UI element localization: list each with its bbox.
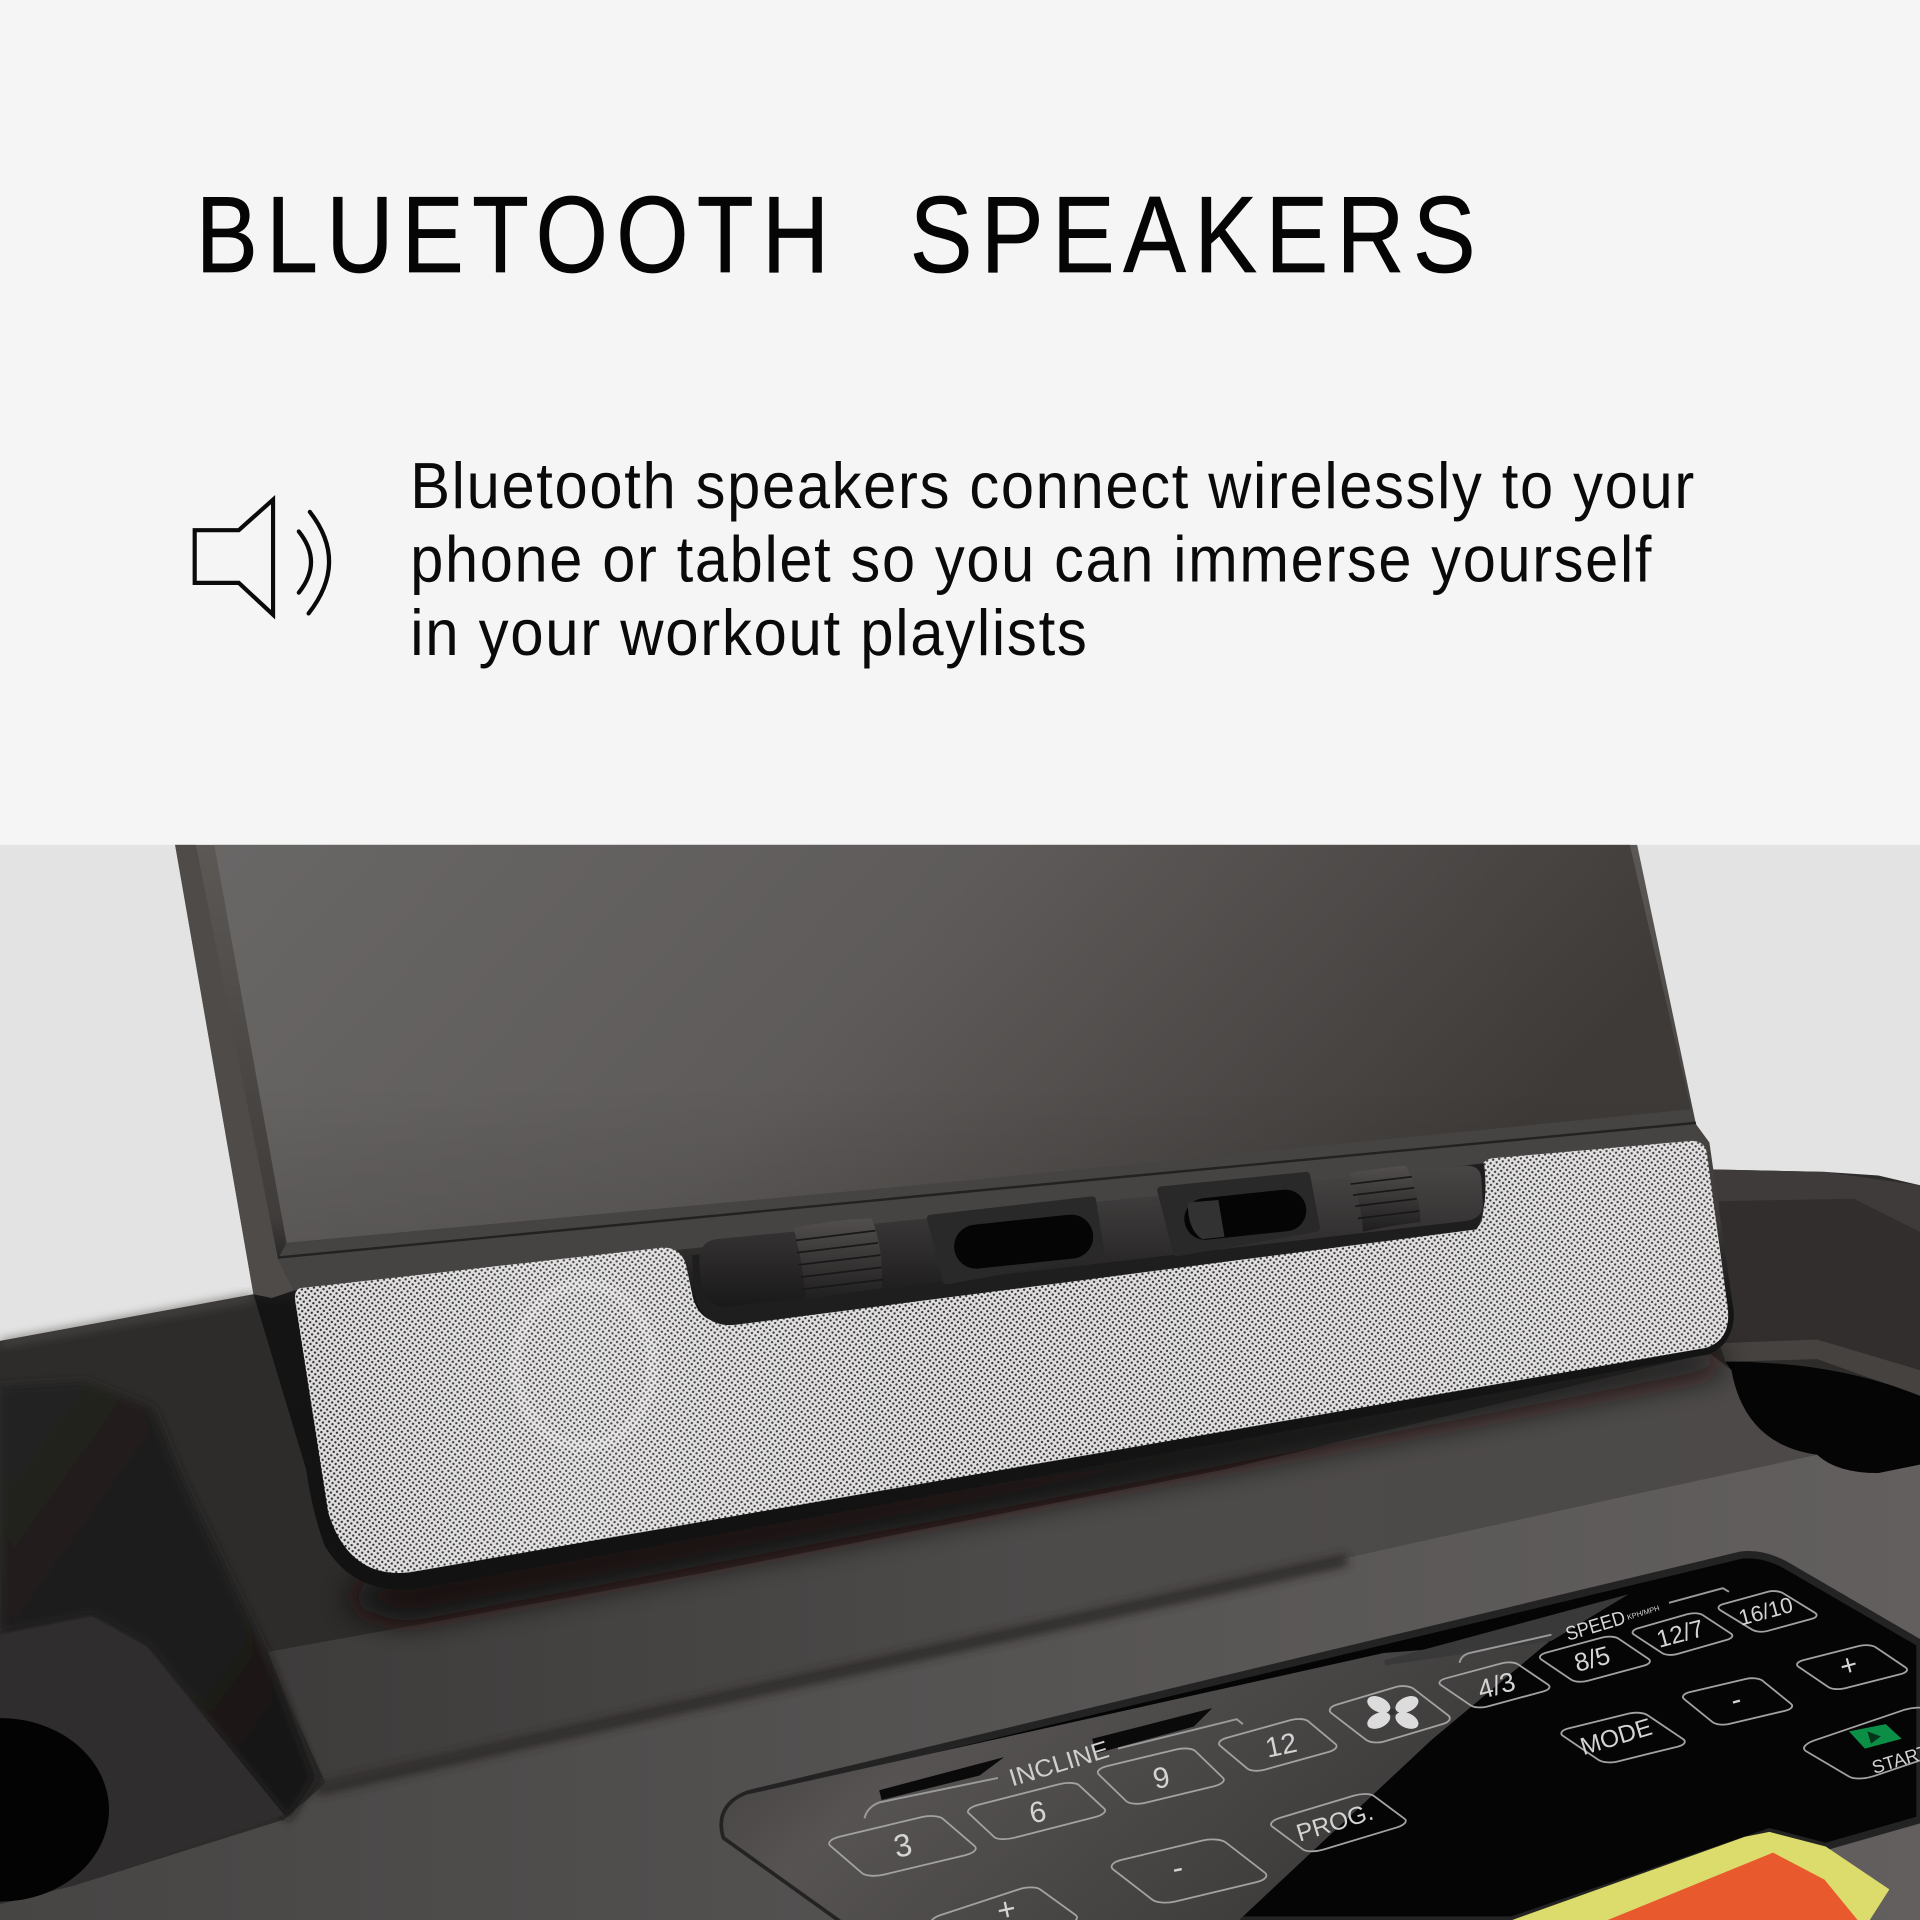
key labels: 3 bbox=[890, 1826, 915, 1865]
console deck base bbox=[0, 1169, 1920, 1920]
key labels: 8/5 bbox=[1571, 1642, 1613, 1678]
upper glass reflection bbox=[1384, 1594, 1629, 1665]
tablet shadow bbox=[343, 1347, 1727, 1622]
right cup holder bbox=[1725, 1362, 1920, 1473]
speed label bbox=[1563, 1603, 1661, 1646]
speed label: SPEED bbox=[1563, 1607, 1628, 1646]
right knob bbox=[1349, 1166, 1420, 1232]
incline label: INCLINE bbox=[1006, 1736, 1112, 1792]
key labels: 6 bbox=[1026, 1795, 1049, 1830]
dark reflections bbox=[879, 1708, 1212, 1800]
icon: fan bbox=[1365, 1693, 1421, 1732]
left lower tray bbox=[0, 1616, 284, 1904]
title bbox=[196, 174, 1484, 295]
right tray bbox=[1709, 1169, 1920, 1396]
key labels: MODE bbox=[1577, 1714, 1655, 1761]
key labels: 12 bbox=[1263, 1727, 1300, 1764]
central deck band bbox=[268, 1353, 1817, 1783]
device holder bbox=[699, 1166, 1483, 1307]
icon: speaker bbox=[195, 500, 329, 615]
key labels: PROG. bbox=[1293, 1799, 1377, 1848]
left knob bbox=[793, 1218, 883, 1300]
key labels: - bbox=[1169, 1849, 1186, 1886]
screen lower frame bbox=[278, 1109, 1702, 1291]
key labels: 12/7 bbox=[1654, 1615, 1707, 1654]
left slot bbox=[952, 1212, 1095, 1271]
frame line bbox=[278, 1123, 1696, 1258]
right slot bbox=[1182, 1188, 1308, 1242]
body text: phone or tablet so you can immerse yourself bbox=[410, 523, 1653, 596]
safety key yellow bbox=[1512, 1832, 1889, 1920]
control panel bbox=[722, 1555, 1920, 1920]
body text: in your workout playlists bbox=[410, 596, 1089, 669]
device holder recess bbox=[692, 1163, 1485, 1325]
key labels: - bbox=[1727, 1683, 1745, 1717]
title: BLUETOOTH bbox=[196, 174, 838, 295]
body text bbox=[410, 449, 1696, 669]
tablet bezel highlight bbox=[175, 845, 294, 1298]
icon: start button bbox=[1849, 1724, 1902, 1749]
photo: treadmill console bbox=[0, 845, 1920, 1920]
photo backdrop bbox=[0, 845, 1920, 1920]
screen bbox=[214, 845, 1691, 1243]
key labels: 9 bbox=[1150, 1760, 1173, 1796]
deck rim highlight bbox=[0, 1297, 253, 1343]
safety key orange bbox=[1608, 1853, 1858, 1920]
tablet bbox=[175, 845, 1734, 1590]
title: SPEAKERS bbox=[910, 174, 1484, 295]
top text panel bbox=[0, 0, 1920, 845]
right slot housing bbox=[1161, 1176, 1316, 1253]
glass reflection bbox=[722, 1640, 1551, 1920]
speed bracket bbox=[1460, 1588, 1729, 1663]
speaker grille bbox=[295, 1141, 1728, 1573]
key labels: 16/10 bbox=[1736, 1592, 1796, 1630]
tablet shell bbox=[175, 845, 1734, 1590]
left slot housing bbox=[931, 1200, 1101, 1281]
speed label: KPH/MPH bbox=[1626, 1603, 1661, 1622]
glass panel bbox=[723, 1555, 1920, 1920]
lower deck surface bbox=[0, 1455, 1920, 1920]
key labels: 4/3 bbox=[1475, 1666, 1518, 1705]
body text: Bluetooth speakers connect wirelessly to your bbox=[410, 449, 1696, 522]
key outlines bbox=[824, 1589, 1920, 1920]
left pocket bbox=[0, 1381, 316, 1821]
deck crease shadow bbox=[316, 1560, 1347, 1790]
left cup holder bbox=[0, 1718, 109, 1902]
key labels bbox=[890, 1592, 1920, 1920]
incline bracket bbox=[864, 1719, 1243, 1818]
key labels: + bbox=[1836, 1647, 1861, 1684]
grille logo ring bbox=[516, 1284, 653, 1446]
